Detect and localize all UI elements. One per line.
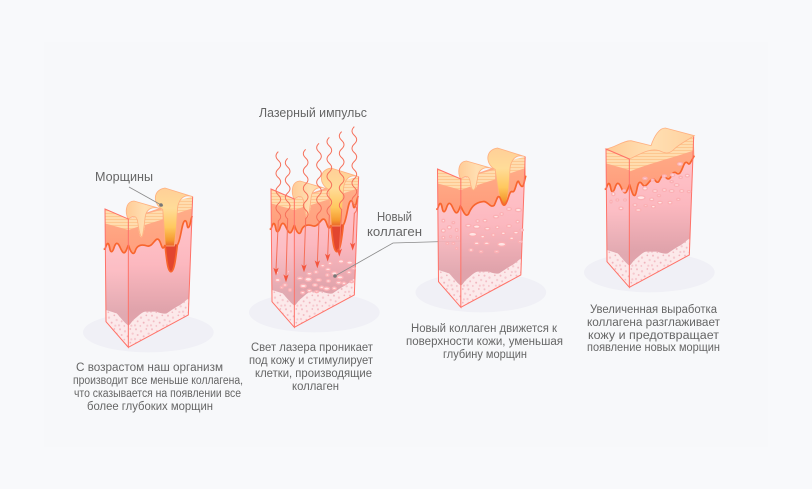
- skin cross-section 2: [249, 168, 380, 332]
- caption 4: [587, 304, 721, 354]
- panel: skin block with wrinkles: [73, 169, 243, 413]
- skin cross-section 3: [415, 148, 546, 312]
- panel: laser pulse block: [249, 105, 497, 393]
- caption 1: производит все меньше коллагена,: [73, 375, 243, 387]
- caption 2: под кожу и стимулирует: [249, 355, 374, 367]
- panel: smoothed skin block: [584, 128, 721, 354]
- caption 1: [73, 362, 243, 413]
- label: wrinkles with leader: Морщины: [95, 169, 153, 184]
- panel: collagen moving up block: [406, 148, 563, 361]
- caption 1: более глубоких морщин: [87, 401, 213, 413]
- label: new collagen with leader: [333, 209, 497, 278]
- caption 3: Новый коллаген движется к: [411, 323, 558, 335]
- caption 4: кожу и предотвращает: [588, 330, 720, 342]
- caption 2: клетки, производящие: [255, 368, 372, 380]
- caption 4: коллагена разглаживает: [587, 317, 721, 329]
- caption 4: появление новых морщин: [587, 342, 720, 354]
- label: wrinkles with leader: [95, 169, 163, 207]
- skin cross-section 1: [83, 188, 214, 352]
- caption 1: что сказывается на появлении все: [74, 388, 241, 400]
- skin cross-section 4: [584, 128, 715, 292]
- new collagen cells 3: [441, 208, 523, 253]
- caption 1: С возрастом наш организм: [76, 362, 223, 374]
- caption 2: коллаген: [292, 381, 339, 393]
- caption 3: глубину морщин: [443, 349, 527, 361]
- laser beams: [273, 127, 357, 282]
- caption 4: Увеличенная выработка: [590, 304, 718, 316]
- label: new collagen with leader: Новый: [377, 209, 412, 224]
- caption 2: [249, 342, 374, 393]
- new collagen cells 4: [610, 163, 691, 211]
- caption 3: поверхности кожи, уменьшая: [406, 336, 563, 348]
- label: laser pulse: Лазерный импульс: [259, 105, 367, 120]
- caption 2: Свет лазера проникает: [251, 342, 374, 354]
- label: new collagen with leader: коллаген: [367, 224, 422, 239]
- new collagen cells 2: [275, 260, 355, 294]
- caption 3: [406, 323, 563, 361]
